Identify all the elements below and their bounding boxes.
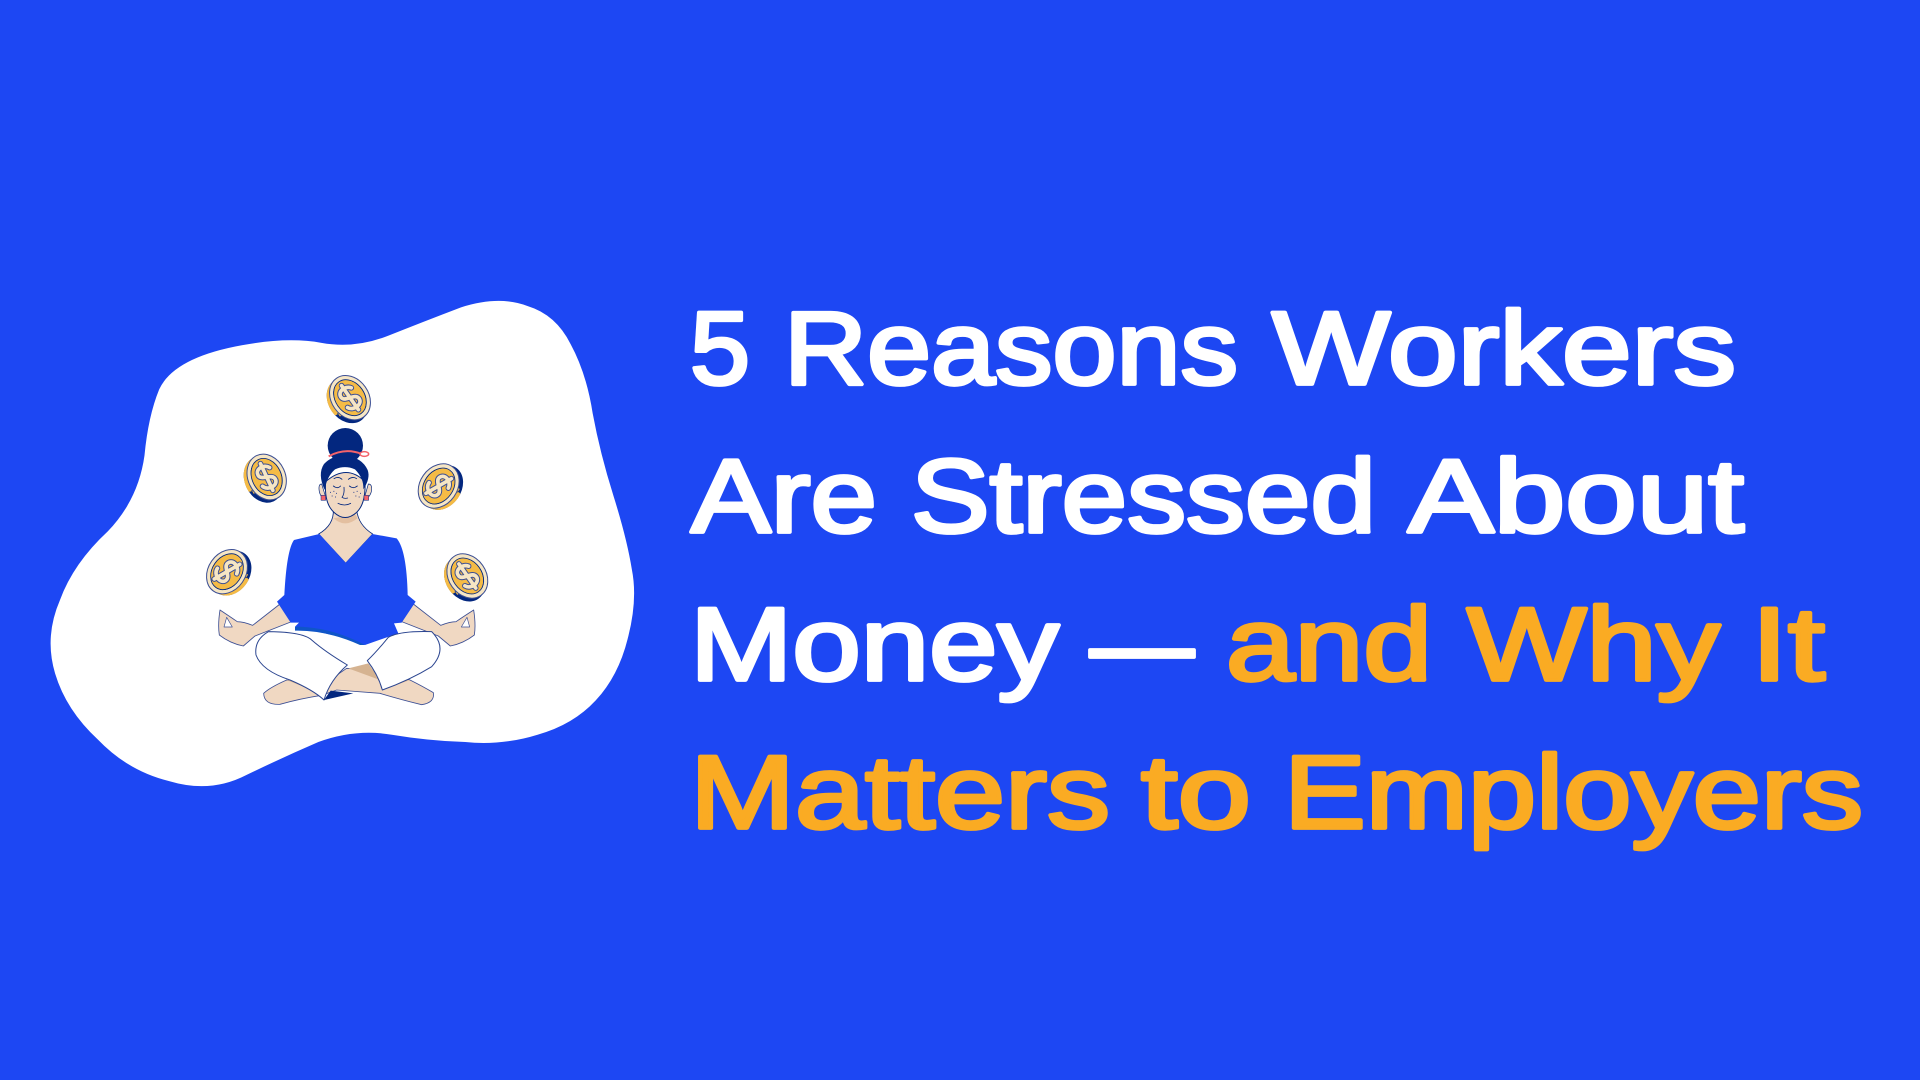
shadow under shirt hem bbox=[295, 627, 365, 645]
title line 3: and bbox=[1226, 587, 1432, 703]
freckles bbox=[330, 491, 361, 497]
title line 2: Stressed bbox=[911, 439, 1376, 555]
right leg bbox=[367, 632, 440, 690]
shadow under legs bbox=[324, 691, 353, 700]
neck shadow bbox=[334, 513, 357, 523]
feet bbox=[264, 668, 434, 705]
title line 2 bbox=[691, 439, 1744, 555]
title line 3 bbox=[690, 587, 1825, 703]
right finger gap bbox=[461, 617, 470, 627]
title line 4 bbox=[690, 735, 1863, 851]
title line 1: 5 bbox=[690, 291, 750, 407]
hair band bbox=[329, 451, 362, 456]
hair bbox=[321, 456, 369, 490]
title bbox=[690, 291, 1863, 851]
title line 2: Are bbox=[691, 439, 877, 555]
coin: upper left bbox=[236, 448, 294, 509]
shirt bbox=[277, 534, 416, 645]
left leg bbox=[256, 632, 347, 700]
title line 1 bbox=[690, 291, 1736, 407]
title line 3: Why bbox=[1467, 587, 1720, 703]
title line 3: Money bbox=[690, 587, 1059, 703]
title line 2: About bbox=[1408, 439, 1744, 555]
title line 3: It bbox=[1751, 587, 1825, 703]
face bbox=[325, 472, 365, 517]
woman figure bbox=[219, 428, 475, 705]
ears bbox=[319, 484, 372, 498]
title line 1: Reasons bbox=[784, 291, 1238, 407]
title line 4: Employers bbox=[1284, 735, 1863, 851]
title line 4: to bbox=[1141, 735, 1251, 851]
coin: upper right bbox=[410, 455, 472, 518]
hair band loop bbox=[360, 452, 369, 456]
left arm and hand bbox=[219, 604, 292, 646]
white blob bbox=[51, 301, 634, 786]
coin: lower left bbox=[198, 540, 260, 604]
coin: lower right bbox=[435, 546, 497, 610]
hair bun bbox=[328, 428, 363, 463]
earrings bbox=[321, 495, 369, 500]
shin shadows bbox=[287, 663, 410, 693]
coin: top bbox=[318, 368, 380, 431]
title line 1: Workers bbox=[1272, 291, 1736, 407]
eyes, nose and mouth bbox=[333, 477, 357, 505]
left finger gap bbox=[224, 617, 232, 627]
right arm and hand bbox=[402, 604, 475, 646]
title line 3: — bbox=[1090, 587, 1194, 703]
illustration: meditating woman juggling coins bbox=[198, 368, 497, 705]
neck and chest bbox=[319, 510, 373, 563]
title line 4: Matters bbox=[690, 735, 1110, 851]
